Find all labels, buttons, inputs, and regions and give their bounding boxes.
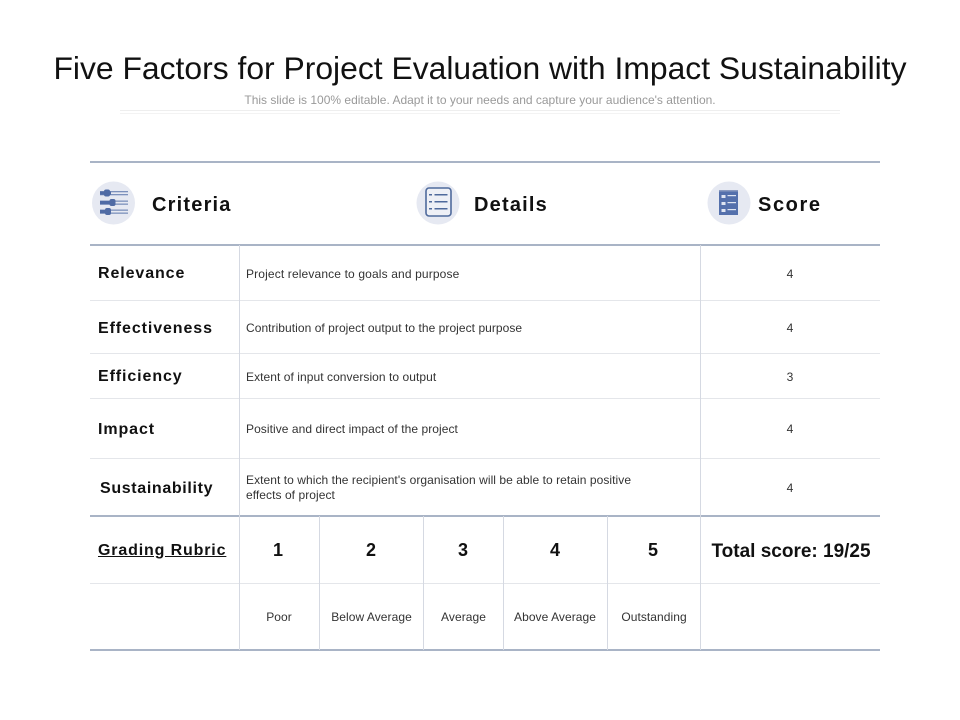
row: grading rubric scores: 1 (273, 540, 283, 560)
heading: details: Details (474, 194, 548, 216)
row: grading rubric scores: Total score: 19/25 (711, 541, 871, 562)
row: relevance: Relevance (98, 265, 185, 282)
row: grading rubric scores: 3 (458, 540, 468, 560)
row: efficiency: Extent of input conversion to output (246, 370, 436, 384)
icon: criteria sliders (92, 182, 135, 224)
icon: score notepad (708, 182, 750, 224)
row: efficiency (98, 368, 793, 385)
row: sustainability: effects of project (246, 488, 335, 502)
subtitle: This slide is 100% editable. Adapt it to your needs and capture your audience's attention. (244, 93, 716, 107)
row: relevance: 4 (787, 267, 793, 281)
row: grading rubric labels (266, 610, 687, 624)
row: impact: 4 (787, 422, 793, 436)
row: sustainability: 4 (787, 481, 793, 495)
row: effectiveness: 4 (787, 321, 793, 335)
row: relevance (98, 265, 793, 282)
row: grading rubric scores: 2 (366, 540, 376, 560)
row: grading rubric labels: Poor (266, 610, 292, 624)
title: Five Factors for Project Evaluation with Impact Sustainability (53, 50, 907, 86)
row: effectiveness: Contribution of project output to the project purpose (246, 321, 522, 335)
heading: criteria: Criteria (152, 194, 232, 216)
row: grading rubric labels: Above Average (514, 610, 596, 624)
row: grading rubric scores (98, 540, 871, 562)
row: efficiency: 3 (787, 370, 793, 384)
row: grading rubric scores: Grading Rubric (98, 542, 226, 559)
row: grading rubric scores: 5 (648, 540, 658, 560)
heading: score: Score (758, 194, 822, 216)
row: grading rubric scores: 4 (550, 540, 560, 560)
row: efficiency: Efficiency (98, 368, 183, 385)
row: impact: Impact (98, 421, 155, 438)
row: relevance: Project relevance to goals and purpose (246, 267, 459, 281)
row: grading rubric labels: Outstanding (621, 610, 687, 624)
row: grading rubric labels: Below Average (331, 610, 412, 624)
row: sustainability: Extent to which the recipient's organisation will be able to retain positive (246, 473, 631, 487)
row: effectiveness (98, 320, 793, 337)
row: sustainability: Sustainability (100, 480, 213, 497)
icon: details list (416, 182, 460, 224)
row: impact (98, 421, 793, 438)
row: grading rubric labels: Average (441, 610, 486, 624)
row: sustainability (100, 473, 793, 502)
row: impact: Positive and direct impact of the project (246, 422, 458, 436)
row: effectiveness: Effectiveness (98, 320, 213, 337)
